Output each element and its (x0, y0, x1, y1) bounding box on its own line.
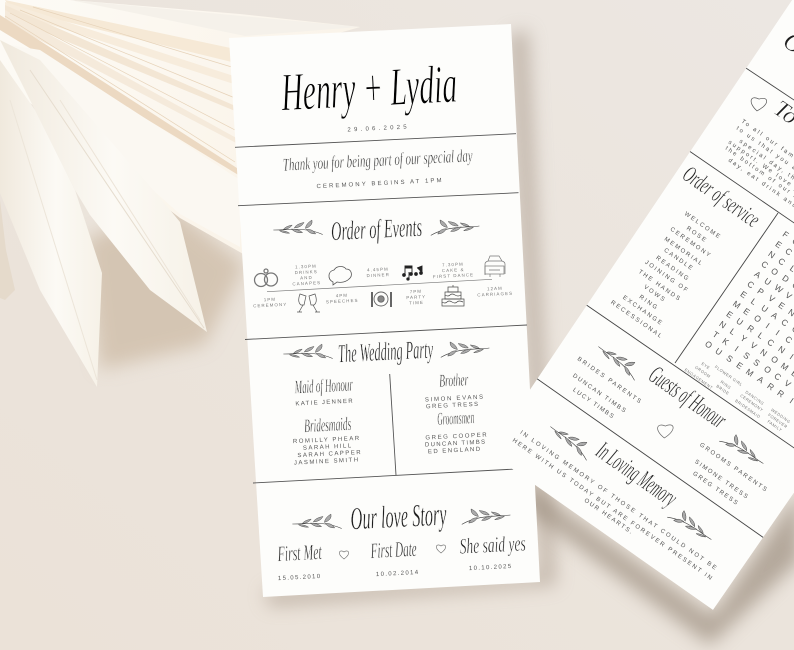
word search: N (776, 344, 787, 355)
word search key: WEDDING (770, 407, 792, 424)
bridesmaid names: ROMILLY PHEAR (293, 436, 361, 445)
first date date: 10.02.2014 (376, 570, 420, 578)
groom's party (425, 369, 489, 455)
word search: C (776, 256, 787, 267)
word search: O (703, 339, 715, 351)
word search key (684, 361, 792, 433)
word search: C (783, 246, 794, 257)
word search: U (713, 346, 724, 357)
word search key: FOREVER (767, 412, 789, 429)
bridesmaid names: SARAH HILL (303, 443, 353, 452)
word search: E (777, 300, 787, 311)
groomsmen names: GREG COOPER (425, 432, 489, 442)
word search: K (721, 336, 731, 347)
bridesmaids: Bridesmaids (304, 414, 352, 437)
word search: E (774, 239, 784, 250)
word search key: FAMILY (766, 419, 783, 433)
sprig left (273, 220, 323, 237)
sprig left (283, 344, 333, 361)
word search: M (744, 366, 755, 379)
sprig right (430, 218, 480, 235)
4.45pm label: 4.45PM (367, 266, 389, 273)
divider 4 (253, 468, 535, 483)
icon: heart (657, 424, 673, 439)
timeline line (267, 279, 492, 292)
brother names: SIMON EVANS (425, 395, 485, 403)
second programme card (488, 0, 794, 610)
word search: N (766, 249, 777, 260)
love story heading (292, 496, 511, 536)
word search: N (717, 319, 728, 330)
names title: Henry + Lydia (279, 54, 458, 122)
service list: JOINING OF (643, 260, 690, 295)
word search: T (711, 329, 721, 340)
word search key: ENGAGEMENT (684, 367, 714, 390)
bride parents names: DUNCAN TIMBS (571, 373, 628, 415)
word search: M (779, 360, 790, 373)
icon: wedding cake (442, 285, 464, 306)
word search: U (759, 303, 770, 314)
7.30pm label: FIRST DANCE (433, 272, 474, 279)
word search: A (770, 310, 780, 321)
service list: WELCOME (683, 211, 722, 241)
maid name: KATIE JENNER (295, 399, 355, 407)
first met: First Met (277, 539, 323, 566)
divider 1 (235, 134, 516, 147)
word search: I (774, 328, 782, 337)
word search: O (769, 266, 781, 278)
brother names: GREG TRESS (426, 402, 480, 410)
in loving memory (519, 420, 719, 572)
bride parent name: LUCY TIMBS (571, 387, 616, 421)
7.30pm label: CAKE & (442, 267, 465, 273)
word search: R (745, 323, 756, 334)
groomsmen names: DUNCAN TIMBS (425, 439, 487, 449)
icon: heart (339, 551, 349, 559)
order of events timeline (253, 256, 513, 312)
7pm label: 7PM (410, 289, 422, 294)
word search: V (784, 290, 794, 301)
memorial message: IN LOVING MEMORY OF THOSE THAT COULD NOT BE (519, 430, 719, 572)
sprig right (440, 340, 490, 357)
word search: E (739, 289, 749, 300)
first date: First Date (370, 536, 417, 563)
word search: Y (739, 333, 749, 344)
word search key: RING (720, 379, 732, 390)
1.30pm label: 1.30PM (295, 263, 317, 270)
icon: plate and cutlery (372, 292, 391, 307)
dried palm leaf (0, 0, 360, 387)
word search: S (725, 353, 735, 364)
word search: E (735, 360, 745, 371)
divider 3 (245, 325, 527, 340)
bridesmaid names (293, 436, 363, 467)
sprig left (598, 346, 636, 380)
word search key: DANCING (744, 389, 765, 406)
icon: music notes (403, 266, 422, 280)
word search: C (783, 334, 794, 345)
shadow of second card (480, 455, 794, 645)
word search: C (772, 371, 783, 382)
word search: O (769, 354, 781, 366)
service list: RING (638, 294, 659, 312)
word search: E (742, 306, 752, 317)
wedding party heading: The Wedding Party (337, 335, 434, 368)
memorial line 2: HERE WITH US TODAY BUT ARE FOREVER PRESENT IN (511, 438, 714, 583)
section lines (532, 67, 794, 538)
word search: I (733, 344, 741, 353)
heading text: Our love Story (350, 496, 448, 536)
groomsmen names (425, 432, 489, 455)
heading text: Order of Events (330, 212, 423, 246)
word search: I (764, 321, 772, 330)
icon: wedding car (485, 256, 505, 277)
she said yes date: 10.10.2025 (469, 564, 513, 572)
word search: W (773, 282, 785, 295)
shadow of main card (264, 30, 556, 606)
bridesmaid names: SARAH CAPPER (297, 450, 363, 459)
12am label: 12AM (487, 286, 503, 291)
word search: A (753, 269, 763, 280)
word search: V (783, 378, 793, 389)
word search: A (756, 374, 766, 385)
she said yes: She said yes (459, 530, 526, 559)
word search: V (767, 293, 777, 304)
grooms parents: GROOMS PARENTS (698, 442, 769, 494)
word search: S (742, 350, 752, 361)
groomsmen names: ED ENGLAND (428, 447, 482, 455)
word search key: FLOWER GIRL (714, 364, 744, 387)
word search: L (728, 326, 738, 337)
word search key: BRIDE (715, 383, 730, 396)
1.30pm label: CANAPES (292, 280, 321, 286)
7.30pm label: 7.30PM (442, 261, 464, 268)
order of events heading (273, 212, 480, 246)
sprig right (719, 434, 764, 464)
groom parent name: SIMONE TRESS (693, 459, 750, 501)
word search (703, 229, 794, 405)
service list: RECESSIONAL (609, 300, 664, 341)
7pm label: PARTY (406, 294, 426, 300)
word search: O (762, 364, 774, 376)
sprig right (667, 510, 712, 540)
service list: THE HANDS (637, 269, 682, 303)
word search: S (752, 357, 762, 368)
icon: champagne glasses (297, 294, 320, 312)
word search: L (749, 296, 759, 307)
1pm label: CEREMONY (253, 302, 287, 308)
word search: M (731, 298, 742, 311)
brides parents: BRIDES PARENTS (576, 356, 643, 406)
main programme card (229, 24, 540, 597)
icon: speech bubble (329, 266, 351, 285)
groom parent name: GREG TRESS (691, 471, 740, 507)
service list: EXCHANGE (621, 295, 664, 327)
word search: O (752, 313, 764, 325)
heading: In Loving Memory (590, 436, 683, 512)
word search key: GROOM (694, 365, 712, 379)
divider 2 (238, 193, 518, 206)
brother names (425, 395, 485, 410)
wedding party heading (283, 335, 490, 368)
service list: ROSE (685, 226, 708, 245)
date: 29.06.2025 (347, 124, 409, 134)
word search: L (756, 330, 766, 341)
service list: VOWS (642, 284, 667, 304)
4pm label: 4PM (336, 293, 348, 298)
1.30pm label: DRINKS (294, 269, 318, 275)
word search key: EYE (701, 361, 711, 371)
guests of honour (571, 340, 769, 507)
vertical divider (390, 374, 396, 475)
word search: F (781, 229, 791, 240)
1.30pm label: AND (300, 275, 313, 280)
word search: R (765, 381, 776, 392)
word search: E (725, 309, 735, 320)
12am label: CARRIAGES (477, 291, 513, 297)
word search: C (759, 259, 770, 270)
icon: heart (750, 97, 767, 112)
word search: P (756, 286, 766, 297)
word search: V (749, 340, 759, 351)
word search: D (780, 273, 791, 284)
order of service (609, 161, 765, 341)
4pm label: SPEECHES (326, 298, 359, 304)
service list: CEREMONY (669, 227, 712, 260)
word search key: BRIDESMAID (734, 398, 762, 419)
first met date: 15.05.2010 (278, 574, 322, 582)
ceremony time: CEREMONY BEGINS AT 1PM (316, 178, 444, 190)
groom's party: Groomsmen (437, 407, 475, 429)
word search: C (765, 337, 776, 348)
word search key: CEREMONY (739, 393, 764, 413)
thank you line: Thank you for being part of our special day (282, 145, 473, 175)
service list: CANDLE (662, 248, 695, 273)
7pm label: TIME (409, 300, 424, 306)
sprig right (461, 507, 511, 524)
word search: N (758, 347, 769, 358)
word search: R (775, 388, 786, 399)
service list: READING (654, 255, 691, 283)
word search: C (745, 279, 756, 290)
icon: heart (436, 545, 446, 553)
sprig left (292, 514, 342, 531)
love story timeline (277, 530, 526, 582)
brothers: Brother (439, 369, 469, 391)
memorial line 3: OUR HEARTS. (583, 498, 634, 537)
bride's party (293, 375, 363, 467)
icon: rings (254, 269, 278, 286)
word search: U (762, 276, 773, 287)
1pm label: 1PM (264, 297, 276, 302)
bridesmaid names: JASMINE SMITH (294, 457, 360, 467)
4.45pm label: DINNER (366, 272, 390, 278)
word search: U (734, 316, 745, 327)
word search: C (779, 317, 790, 328)
bride's party: Maid of Honour (294, 375, 353, 398)
service list: MEMORIAL (663, 236, 704, 268)
service list (609, 211, 722, 341)
sprig left (550, 426, 588, 460)
